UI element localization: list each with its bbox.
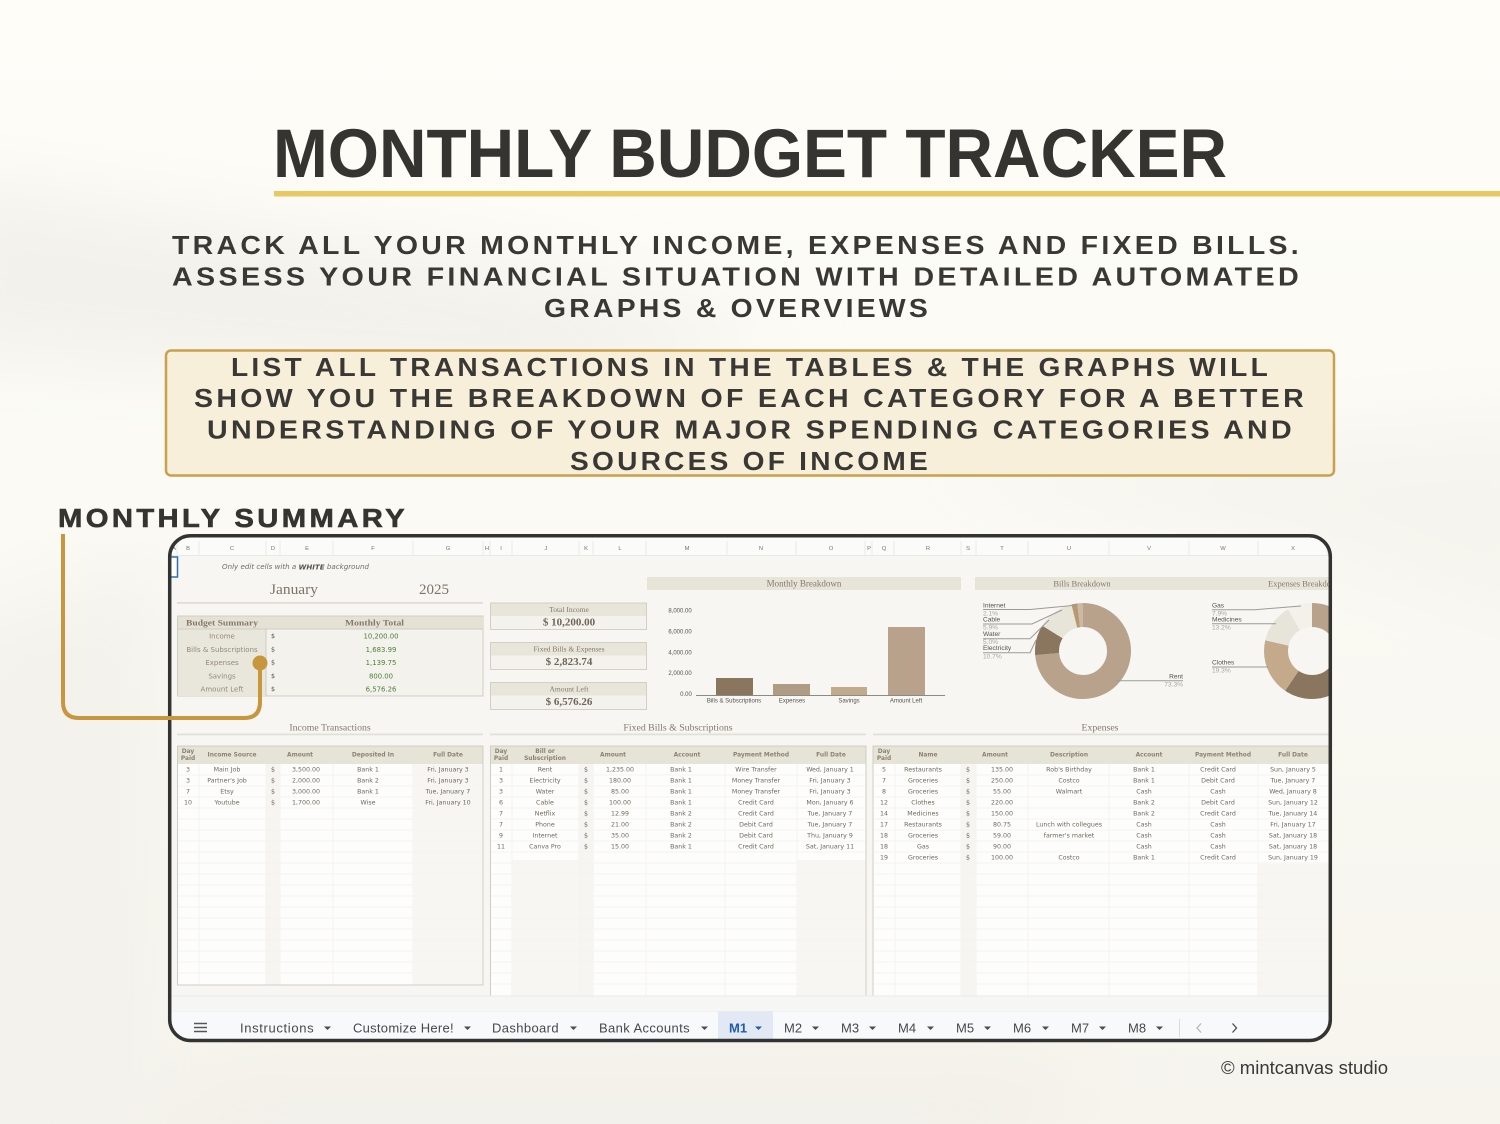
table: expenses: Sun, January 5: [1270, 767, 1316, 774]
column header strip: N: [759, 546, 763, 552]
table: income transactions: 3: [186, 767, 190, 774]
chart: monthly breakdown: Expenses: [779, 698, 805, 704]
table: budget summary: 6,576.26: [366, 686, 396, 694]
table: expenses: $: [966, 833, 970, 840]
table: expenses: Day: [878, 749, 890, 755]
column header strip: T: [1000, 546, 1004, 552]
table: expenses: Sun, January 12: [1268, 800, 1318, 807]
table: fixed bills and subscriptions: Netflix: [535, 811, 556, 818]
table: expenses: $: [966, 789, 970, 796]
chart: expenses breakdown donut: Clothes: [1212, 660, 1235, 666]
table: expenses: Amount: [982, 753, 1008, 759]
panel: spreadsheet screenshot: [168, 536, 1348, 1042]
title underline: [274, 191, 1500, 196]
chart: bills breakdown donut: Internet: [983, 602, 1006, 610]
table: expenses: Bank 1: [1133, 778, 1155, 785]
table: income transactions: Bank 1: [357, 789, 379, 796]
table: fixed bills and subscriptions: $: [584, 800, 588, 807]
column header strip: P: [867, 546, 871, 552]
table: fixed bills and subscriptions: Bank 2: [670, 811, 692, 818]
table: expenses: Debit Card: [1201, 778, 1235, 785]
table: budget summary: Bills & Subscriptions: [186, 646, 258, 654]
column header strip: L: [618, 546, 622, 552]
table: fixed bills and subscriptions: 1: [499, 767, 503, 774]
table: expenses: Credit Card: [1200, 855, 1236, 862]
chart: bills breakdown donut: Electricity: [983, 645, 1012, 652]
sheet tabs bar: M8: [1128, 1020, 1146, 1036]
table: income transactions: Bank 2: [357, 778, 379, 785]
month and year: 2025: [419, 582, 449, 598]
chart: monthly breakdown: Monthly Breakdown: [767, 578, 842, 588]
table: expenses: Restaurants: [904, 822, 942, 829]
table: fixed bills and subscriptions: 180.00: [609, 778, 631, 785]
table: fixed bills and subscriptions: Canva Pro: [529, 844, 561, 851]
table: fixed bills and subscriptions: Debit Card: [739, 833, 773, 840]
chart: monthly breakdown: Savings: [838, 698, 860, 704]
table: expenses: Payment Method: [1195, 753, 1251, 759]
table: expenses: Bank 1: [1133, 767, 1155, 774]
table: fixed bills and subscriptions: Day: [495, 749, 507, 755]
table: expenses: Cash: [1210, 822, 1226, 829]
table: fixed bills and subscriptions: Credit Card: [738, 811, 774, 818]
table: fixed bills and subscriptions: Bill or: [535, 749, 555, 755]
table: fixed bills and subscriptions: Bank 2: [670, 822, 692, 829]
table: budget summary: Savings: [208, 673, 236, 681]
table: fixed bills and subscriptions: 21.00: [611, 822, 629, 829]
sheet tabs bar: [170, 1012, 1330, 1042]
table: budget summary: $: [271, 647, 275, 654]
table: expenses: 59.00: [993, 833, 1011, 840]
callout box: LIST ALL TRANSACTIONS IN THE TABLES & THE GRAPHS WILL: [231, 352, 1271, 382]
chart: bills breakdown donut: 73.3%: [1164, 682, 1183, 688]
callout box: SOURCES OF INCOME: [570, 446, 931, 476]
table: expenses: Tue, January 14: [1268, 811, 1317, 818]
sheet tabs bar: Dashboard: [492, 1020, 559, 1036]
table: budget summary: $: [271, 686, 275, 693]
sheet tabs bar: Instructions: [240, 1020, 314, 1036]
table: budget summary: Amount Left: [201, 686, 244, 694]
table: fixed bills and subscriptions: $: [584, 833, 588, 840]
table: expenses: Sat, January 18: [1269, 833, 1317, 840]
column header strip: I: [500, 546, 502, 552]
table: expenses: Sat, January 18: [1269, 844, 1317, 851]
table: income transactions: Tue, January 7: [425, 789, 470, 796]
table: fixed bills and subscriptions: 7: [499, 822, 503, 829]
column header strip: F: [371, 546, 375, 552]
scrollbar strip: [170, 996, 1330, 1012]
table: fixed bills and subscriptions: Tue, January 7: [807, 822, 852, 829]
card: amount left: $ 6,576.26: [546, 696, 593, 708]
table: budget summary: 1,139.75: [366, 659, 396, 667]
table: fixed bills and subscriptions: Bank 1: [670, 789, 692, 796]
card: total income: $ 10,200.00: [543, 616, 596, 628]
table: fixed bills and subscriptions: Water: [536, 789, 555, 796]
table: budget summary: Monthly Total: [345, 618, 405, 628]
table: fixed bills and subscriptions: Fixed Bills & Subscriptions: [623, 722, 733, 734]
column header strip: H: [485, 546, 489, 552]
table: budget summary: Budget Summary: [186, 618, 259, 628]
table: budget summary: $: [271, 633, 275, 640]
table: expenses: $: [966, 811, 970, 818]
intro text: GRAPHS & OVERVIEWS: [544, 293, 931, 323]
table: fixed bills and subscriptions: Credit Card: [738, 800, 774, 807]
table: expenses: Cash: [1136, 822, 1152, 829]
table: income transactions: $: [271, 800, 275, 807]
table: expenses: 7: [882, 778, 886, 785]
table: expenses: $: [966, 855, 970, 862]
column header strip: J: [545, 546, 548, 552]
table: fixed bills and subscriptions: Fri, January 3: [809, 778, 851, 785]
table: fixed bills and subscriptions: Mon, January 6: [806, 800, 854, 807]
table: expenses: Gas: [917, 844, 929, 851]
chart: bills breakdown donut: 2.1%: [983, 610, 998, 618]
table: income transactions: Fri, January 3: [427, 778, 469, 785]
selected cell: [171, 556, 178, 578]
table: fixed bills and subscriptions: $: [584, 767, 588, 774]
sheet tabs bar: M6: [1013, 1020, 1031, 1036]
chart: monthly breakdown: 4,000.00: [668, 650, 692, 656]
table: fixed bills and subscriptions: Phone: [535, 822, 555, 829]
table: budget summary: $: [271, 673, 275, 680]
card: fixed bills and expenses: [490, 642, 646, 670]
table: expenses: Rob's Birthday: [1046, 767, 1092, 774]
chart: bills breakdown donut: 5.9%: [983, 624, 998, 632]
table: expenses: 18: [880, 844, 888, 851]
month and year: January: [270, 582, 319, 598]
table: expenses: 12: [880, 800, 888, 807]
table: expenses: Credit Card: [1200, 811, 1236, 818]
table: expenses: Expenses: [1081, 722, 1119, 734]
chart: monthly breakdown: 0.00: [680, 692, 692, 698]
table: income transactions: Bank 1: [357, 767, 379, 774]
chart: bills breakdown donut: 10.7%: [983, 654, 1002, 660]
table: fixed bills and subscriptions: Money Transfer: [732, 778, 781, 785]
table: expenses: $: [966, 800, 970, 807]
section heading: monthly summary: MONTHLY SUMMARY: [58, 503, 408, 533]
table: income transactions: 3,500.00: [292, 767, 320, 774]
table: fixed bills and subscriptions: 3: [499, 789, 503, 796]
table: fixed bills and subscriptions: Paid: [494, 756, 508, 762]
credit: © mintcanvas studio: [1221, 1058, 1388, 1078]
table: fixed bills and subscriptions: 7: [499, 811, 503, 818]
table: fixed bills and subscriptions: $: [584, 811, 588, 818]
table: fixed bills and subscriptions: 12.99: [611, 811, 629, 818]
chart: bills breakdown donut: Bills Breakdown: [1053, 578, 1111, 588]
table: expenses: [873, 722, 1329, 996]
table: fixed bills and subscriptions: Payment Method: [733, 753, 789, 759]
table: income transactions: Etsy: [220, 789, 234, 796]
column header strip: R: [926, 546, 930, 552]
table: expenses: Groceries: [908, 855, 938, 862]
column header strip: M: [685, 546, 690, 552]
table: income transactions: 3,000.00: [292, 789, 320, 796]
table: income transactions: $: [271, 789, 275, 796]
table: expenses: Cash: [1210, 833, 1226, 840]
table: expenses: Clothes: [911, 800, 935, 807]
table: expenses: Cash: [1210, 844, 1226, 851]
table: fixed bills and subscriptions: 9: [499, 833, 503, 840]
table: income transactions: 7: [186, 789, 190, 796]
column header strip: U: [1067, 546, 1071, 552]
chart: expenses breakdown donut: [1212, 578, 1348, 687]
table: fixed bills and subscriptions: Credit Card: [738, 844, 774, 851]
table: expenses: Tue, January 7: [1270, 778, 1315, 785]
table: income transactions: Partner's Job: [207, 778, 247, 785]
intro text: ASSESS YOUR FINANCIAL SITUATION WITH DETAILED AUTOMATED: [172, 262, 1302, 292]
table: income transactions: 2,000.00: [292, 778, 320, 785]
chart: bills breakdown donut: Water: [983, 631, 1001, 638]
sheet tabs bar: M1: [729, 1020, 747, 1036]
table: income transactions: 1,700.00: [292, 800, 320, 807]
chart: bills breakdown donut: [975, 577, 1330, 688]
sheet tabs bar: M4: [898, 1020, 916, 1036]
table: budget summary: 800.00: [369, 673, 393, 681]
table: expenses: Account: [1136, 753, 1163, 759]
table: fixed bills and subscriptions: $: [584, 789, 588, 796]
table: fixed bills and subscriptions: Debit Card: [739, 822, 773, 829]
table: expenses: Debit Card: [1201, 800, 1235, 807]
table: income transactions: $: [271, 767, 275, 774]
table: income transactions: Fri, January 10: [425, 800, 471, 807]
table: fixed bills and subscriptions: $: [584, 822, 588, 829]
table: income transactions: Amount: [287, 753, 313, 759]
table: fixed bills and subscriptions: [490, 722, 866, 996]
table: fixed bills and subscriptions: $: [584, 778, 588, 785]
intro text: TRACK ALL YOUR MONTHLY INCOME, EXPENSES AND FIXED BILLS.: [172, 230, 1302, 260]
table: expenses: farmer's market: [1044, 833, 1095, 840]
table: budget summary: [178, 616, 483, 696]
table: expenses: $: [966, 844, 970, 851]
title: MONTHLY BUDGET TRACKER: [273, 115, 1227, 192]
column header strip: G: [446, 546, 451, 552]
sheet tabs bar: M5: [956, 1020, 974, 1036]
table: expenses: Full Date: [1278, 753, 1308, 759]
table: expenses: 135.00: [991, 767, 1013, 774]
table: fixed bills and subscriptions: Money Transfer: [732, 789, 781, 796]
callout box: UNDERSTANDING OF YOUR MAJOR SPENDING CATEGORIES AND: [207, 414, 1295, 444]
icon: previous and next: [1197, 1024, 1201, 1032]
table: expenses: 18: [880, 833, 888, 840]
table: income transactions: $: [271, 778, 275, 785]
chart: bills breakdown donut: Cable: [983, 616, 1001, 624]
table: income transactions: Youtube: [213, 800, 240, 807]
table: expenses: 100.00: [991, 855, 1013, 862]
table: expenses: 150.00: [991, 811, 1013, 818]
chart: expenses breakdown donut: Expenses Breakdown: [1268, 578, 1342, 588]
table: fixed bills and subscriptions: 15.00: [611, 844, 629, 851]
column header strip: C: [230, 546, 234, 552]
chart: expenses breakdown donut: 19.3%: [1212, 668, 1231, 674]
table: income transactions: [177, 722, 483, 985]
table: income transactions: Income Transactions: [289, 722, 371, 734]
column header strip: Q: [882, 546, 887, 552]
column header strip: D: [271, 546, 275, 552]
icon: tab arrows: [324, 1026, 1163, 1030]
table: income transactions: Deposited In: [352, 753, 394, 759]
table: income transactions: Paid: [181, 756, 195, 762]
month and year: [177, 584, 483, 604]
chart: monthly breakdown: Amount Left: [890, 698, 923, 704]
table: fixed bills and subscriptions: Thu, January 9: [806, 833, 853, 840]
table: fixed bills and subscriptions: 100.00: [609, 800, 631, 807]
table: expenses: 80.75: [993, 822, 1011, 829]
table: expenses: Medicines: [907, 811, 939, 818]
table: expenses: Name: [918, 753, 938, 759]
table: expenses: Groceries: [908, 778, 938, 785]
table: fixed bills and subscriptions: Bank 2: [670, 833, 692, 840]
table: expenses: $: [966, 778, 970, 785]
column header strip: O: [829, 546, 834, 552]
chart: bills breakdown donut: Rent: [1169, 674, 1183, 680]
table: expenses: Cash: [1136, 833, 1152, 840]
sheet tabs bar: Bank Accounts: [599, 1020, 690, 1036]
table: fixed bills and subscriptions: 6: [499, 800, 503, 807]
card: total income: Total Income: [549, 605, 590, 614]
sheet tabs bar: M2: [784, 1020, 802, 1036]
table: expenses: Description: [1050, 753, 1088, 759]
table: expenses: Cash: [1210, 789, 1226, 796]
table: fixed bills and subscriptions: Bank 1: [670, 778, 692, 785]
chart: bills breakdown donut: 5.0%: [983, 639, 998, 646]
chart: expenses breakdown donut: 7.9%: [1212, 610, 1227, 618]
card: fixed bills and expenses: Fixed Bills & Expenses: [533, 644, 605, 654]
table: fixed bills and subscriptions: 85.00: [611, 789, 629, 796]
table: budget summary: Income: [209, 633, 235, 641]
table: expenses: Bank 2: [1133, 811, 1155, 818]
table: expenses: Groceries: [908, 833, 938, 840]
chart: expenses breakdown donut: Medicines: [1212, 616, 1242, 624]
table: expenses: $: [966, 822, 970, 829]
table: income transactions: Fri, January 3: [427, 767, 469, 774]
table: budget summary: $: [271, 660, 275, 667]
table: income transactions: Income Source: [208, 753, 256, 759]
table: expenses: 5: [882, 767, 886, 774]
table: income transactions: Main Job: [214, 767, 240, 774]
intro text: [172, 230, 1302, 323]
table: fixed bills and subscriptions: Cable: [536, 800, 554, 807]
chart: monthly breakdown: 8,000.00: [668, 608, 692, 614]
table: expenses: Lunch with collegues: [1036, 822, 1102, 829]
table: fixed bills and subscriptions: Amount: [600, 753, 626, 759]
chart: monthly breakdown: 2,000.00: [668, 671, 692, 677]
icon: menu: [194, 1024, 207, 1032]
table: income transactions: 3: [186, 778, 190, 785]
sheet tabs bar: Customize Here!: [353, 1020, 454, 1036]
chart: monthly breakdown: 6,000.00: [668, 630, 692, 636]
table: expenses: 17: [880, 822, 888, 829]
table: expenses: 90.00: [993, 844, 1011, 851]
card: fixed bills and expenses: $ 2,823.74: [546, 656, 593, 668]
table: budget summary: 10,200.00: [363, 633, 399, 641]
note: edit cells: Only edit cells with a WHITE background: [222, 562, 369, 571]
column header strip: W: [1220, 546, 1226, 552]
table: expenses: Credit Card: [1200, 767, 1236, 774]
card: total income: [490, 603, 646, 630]
table: expenses: Paid: [877, 756, 891, 762]
table: fixed bills and subscriptions: Sat, January 11: [806, 844, 854, 851]
column header strip: A: [172, 546, 176, 552]
column header strip: [172, 541, 1328, 556]
card: amount left: [490, 682, 646, 710]
table: fixed bills and subscriptions: Bank 1: [670, 844, 692, 851]
table: income transactions: 10: [184, 800, 192, 807]
column header strip: E: [305, 546, 309, 552]
table: expenses: Walmart: [1056, 789, 1083, 796]
sheet tabs bar: M3: [841, 1020, 859, 1036]
table: expenses: Costco: [1058, 778, 1080, 785]
chart: expenses breakdown donut: Gas: [1212, 602, 1225, 610]
table: fixed bills and subscriptions: 35.00: [611, 833, 629, 840]
table: fixed bills and subscriptions: Bank 1: [670, 800, 692, 807]
table: expenses: 220.00: [991, 800, 1013, 807]
table: expenses: Cash: [1136, 789, 1152, 796]
table: expenses: 19: [880, 855, 888, 862]
table: fixed bills and subscriptions: Full Date: [816, 753, 846, 759]
table: budget summary: Expenses: [205, 659, 239, 667]
table: expenses: 55.00: [993, 789, 1011, 796]
table: fixed bills and subscriptions: Bank 1: [670, 767, 692, 774]
table: fixed bills and subscriptions: $: [584, 844, 588, 851]
table: fixed bills and subscriptions: Account: [674, 753, 701, 759]
table: expenses: Sun, January 19: [1268, 855, 1318, 862]
column header strip: X: [1291, 546, 1295, 552]
table: expenses: 14: [880, 811, 888, 818]
table: income transactions: Wise: [360, 800, 376, 807]
table: fixed bills and subscriptions: Rent: [538, 767, 553, 774]
callout box: [166, 350, 1334, 476]
table: expenses: 8: [882, 789, 886, 796]
table: budget summary: 1,683.99: [366, 646, 396, 654]
chart: expenses breakdown donut: 13.2%: [1212, 624, 1231, 632]
table: expenses: Cash: [1136, 844, 1152, 851]
column header strip: B: [186, 546, 190, 552]
table: expenses: Costco: [1058, 855, 1080, 862]
column header strip: S: [966, 546, 970, 552]
table: fixed bills and subscriptions: Electricity: [529, 778, 561, 785]
column header strip: K: [584, 546, 588, 552]
table: fixed bills and subscriptions: Subscription: [524, 756, 566, 762]
table: fixed bills and subscriptions: 3: [499, 778, 503, 785]
callout box: SHOW YOU THE BREAKDOWN OF EACH CATEGORY FOR A BETTER: [194, 383, 1307, 413]
table: expenses: 250.00: [991, 778, 1013, 785]
connector: summary to table: [63, 534, 268, 718]
table: expenses: Groceries: [908, 789, 938, 796]
table: expenses: $: [966, 767, 970, 774]
table: fixed bills and subscriptions: Tue, January 7: [807, 811, 852, 818]
chart: monthly breakdown: [647, 577, 961, 704]
table: expenses: Fri, January 17: [1270, 822, 1316, 829]
table: income transactions: Full Date: [433, 753, 463, 759]
table: income transactions: Day: [182, 749, 194, 755]
table: fixed bills and subscriptions: Fri, January 3: [809, 789, 851, 796]
table: fixed bills and subscriptions: Internet: [532, 833, 558, 840]
column header strip: V: [1147, 546, 1151, 552]
table: fixed bills and subscriptions: Wed, January 1: [806, 767, 854, 774]
table: expenses: Wed, January 8: [1269, 789, 1317, 796]
table: fixed bills and subscriptions: 1,235.00: [606, 767, 634, 774]
table: expenses: Restaurants: [904, 767, 942, 774]
card: amount left: Amount Left: [550, 684, 589, 694]
chart: monthly breakdown: Bills & Subscriptions: [707, 698, 761, 704]
table: fixed bills and subscriptions: 11: [497, 844, 505, 851]
table: expenses: Bank 1: [1133, 855, 1155, 862]
sheet tabs bar: M7: [1071, 1020, 1089, 1036]
table: fixed bills and subscriptions: Wire Transfer: [735, 767, 777, 774]
table: expenses: Bank 2: [1133, 800, 1155, 807]
